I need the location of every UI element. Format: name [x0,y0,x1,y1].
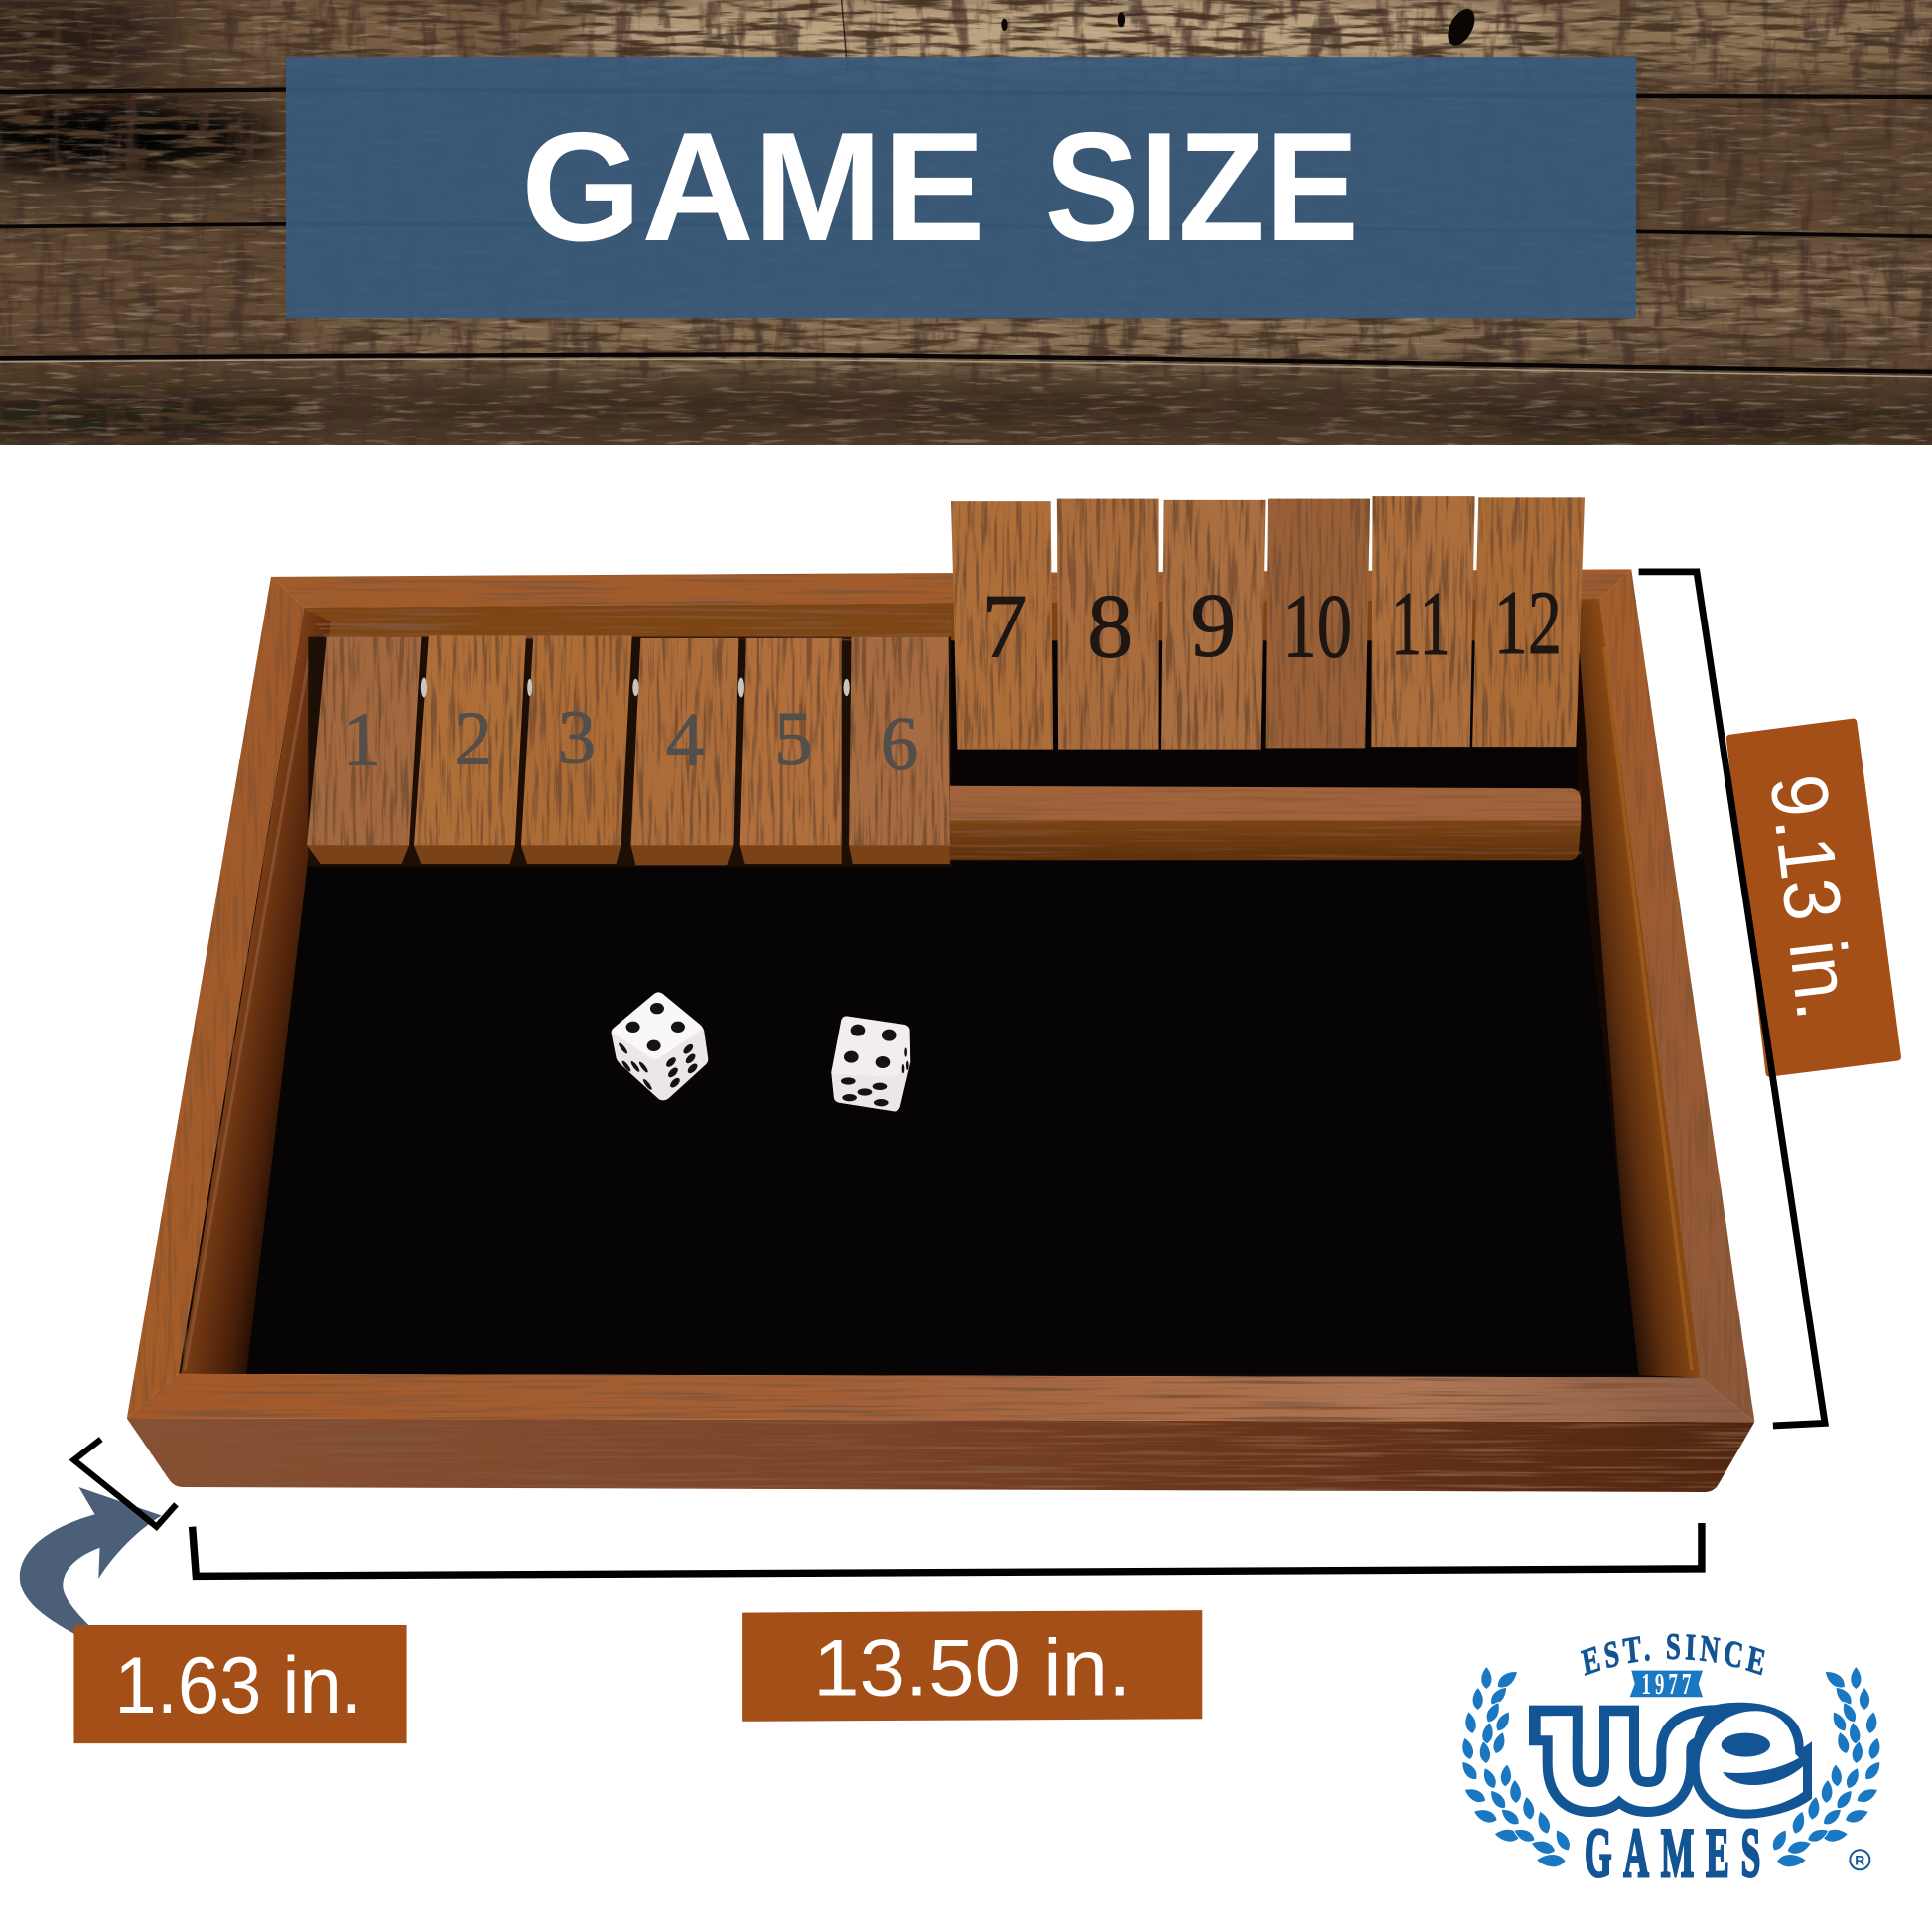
lowered tile numbers: 6 [881,700,918,785]
e outline [1691,1703,1812,1819]
inner back wall [305,599,1599,653]
tray top rim [271,569,1631,608]
registered mark [1850,1850,1869,1869]
1977 text: 1977 [1641,1666,1692,1701]
black felt [246,858,1639,1375]
raised tile 11 [1371,496,1475,747]
tray game board [111,481,1774,1503]
lowered tile numbers [344,694,918,785]
title text: SIZE [1044,100,1359,274]
games text: GAMES [1585,1815,1760,1892]
est since arched text [1581,1634,1765,1676]
depth label [73,1625,407,1743]
die two [831,1016,910,1111]
raised tile numbers: 8 [1087,575,1133,676]
tray left rim [127,577,305,1418]
raised tile numbers: 9 [1190,574,1236,675]
width label [742,1610,1202,1722]
w outline [1529,1706,1718,1797]
logo: WE Games [1462,1634,1880,1892]
lowered tile numbers: 2 [454,695,492,780]
metal hinge pins [421,678,850,697]
depth value: 1.63 in. [114,1641,362,1730]
lowered tile numbers: 5 [774,695,812,780]
raised tile numbers: 10 [1282,575,1352,676]
title text [527,131,1354,242]
laurel wreath left [1458,1666,1574,1867]
wood plank colours [0,0,1932,446]
rail [950,786,1581,860]
title banner [286,57,1636,318]
height bracket [1639,572,1825,1426]
w fill [1541,1716,1718,1797]
vertical wood grain [311,496,1582,846]
lowered tile 2 [414,635,526,845]
lowered tile 5 [740,638,842,845]
plank cracks [0,0,1932,377]
raised tile numbers: 12 [1494,572,1562,673]
wood grain [0,0,1932,445]
header: wood plank band [0,0,1932,446]
e fill [1700,1711,1803,1810]
raised tile numbers: 11 [1391,573,1450,674]
wood knots [1001,9,1475,46]
rail grain [950,787,1581,860]
tray front face [127,1418,1754,1492]
depth bracket [73,1440,176,1527]
raised tile 10 [1266,499,1370,748]
wall highlights [185,640,1692,1370]
lowered tile 6 [849,637,950,845]
tray interior base [179,599,1701,1378]
1977 ribbon [1630,1666,1703,1701]
tray front rim [127,1374,1754,1422]
raised tile numbers: 7 [982,575,1027,676]
e lower slot [1723,1755,1803,1785]
lowered tile 1 [307,637,421,845]
die one [612,992,708,1100]
e counter [1722,1733,1770,1757]
raised tile 8 [1057,499,1159,750]
inner right wall [1576,599,1701,1378]
raised tile 9 [1161,500,1266,750]
tray right rim [1599,569,1754,1422]
est since text on arc: EST. SINCE [1581,1634,1765,1676]
title text: GAME [521,100,986,274]
dark gap behind lowered tiles [308,637,951,866]
depth arrow [20,1487,162,1635]
raised tile 7 [951,501,1053,750]
height dimension: label [1729,722,1897,1073]
width value: 13.50 in. [813,1624,1131,1714]
dice [612,992,910,1111]
lowered tile 3 [521,635,632,845]
we wordmark [1529,1703,1812,1819]
lowered tile numbers: 3 [558,694,596,779]
side rim grain [129,570,1755,1420]
lowered tile 4 [630,638,738,845]
height value: 9.13 in. [1752,770,1869,1025]
inner left wall [181,608,331,1374]
lowered tile front faces [307,845,950,865]
width bracket [193,1523,1702,1576]
registered letter: R [1855,1852,1864,1867]
raised tile numbers [982,572,1562,676]
raised tile 12 [1472,497,1585,747]
lowered tile numbers: 1 [344,697,381,782]
laurel wreath right [1769,1666,1884,1867]
dark gap behind raised tiles [950,640,1578,791]
lowered tile numbers: 4 [666,697,704,782]
rim and rail grain [127,571,1751,1492]
